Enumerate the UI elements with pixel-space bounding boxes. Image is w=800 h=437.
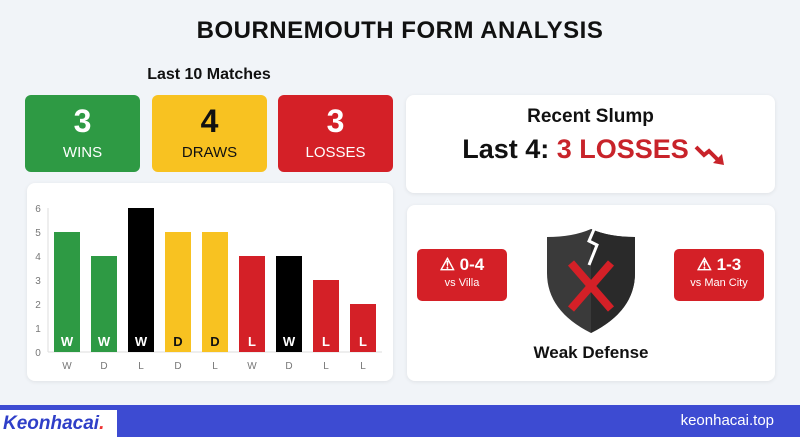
title: BOURNEMOUTH FORM ANALYSIS — [197, 17, 603, 44]
panel: bar chart: W — [98, 334, 111, 349]
panel: recent slump: Recent Slump — [527, 106, 654, 127]
panel: bar chart: D — [100, 361, 108, 372]
bars — [54, 208, 376, 352]
panel: bar chart: 3 — [35, 276, 41, 287]
panel: weak defense — [407, 205, 775, 381]
stat: losses — [278, 95, 393, 172]
panel: bar chart: D — [173, 334, 183, 349]
panel: recent slump: Last 4: 3 LOSSES — [462, 134, 689, 164]
panel: bar chart: 1 — [35, 324, 41, 335]
panel: bar chart — [27, 183, 393, 381]
stat: losses: 3 — [327, 103, 344, 139]
panel: bar chart: W — [62, 361, 72, 372]
icon: down arrow — [694, 146, 724, 165]
callout: 0-4 vs villa: ⚠ 0-4 — [440, 255, 484, 274]
footer — [0, 405, 800, 437]
panel: bar chart: L — [212, 361, 218, 372]
panel: bar chart: W — [61, 334, 74, 349]
panel: bar chart: L — [323, 361, 329, 372]
icon: broken shield — [547, 229, 635, 333]
callout: 1-3 vs man city — [674, 249, 764, 301]
logo — [0, 410, 117, 437]
panel: bar chart: 5 — [35, 228, 41, 239]
stat: draws: 4 — [201, 103, 218, 139]
callout: 0-4 vs villa: vs Villa — [445, 277, 479, 289]
panel: bar chart: D — [210, 334, 220, 349]
stat: wins: 3 — [74, 103, 91, 139]
panel: bar chart: W — [247, 361, 257, 372]
panel: bar chart: 0 — [35, 348, 41, 359]
panel: bar chart: D — [174, 361, 182, 372]
panel: bar chart: L — [138, 361, 144, 372]
subtitle: last 10 matches: Last 10 Matches — [147, 66, 271, 83]
panel: bar chart: L — [248, 334, 256, 349]
stat: wins: WINS — [63, 144, 102, 161]
stat: wins — [25, 95, 140, 172]
panel: bar chart: 6 — [35, 204, 41, 215]
panel: bar chart: L — [360, 361, 366, 372]
stat: draws: DRAWS — [182, 144, 237, 161]
stat: losses: LOSSES — [305, 144, 366, 161]
callout: 0-4 vs villa — [417, 249, 507, 301]
panel: bar chart: 4 — [35, 252, 41, 263]
panel: recent slump — [406, 95, 775, 193]
panel: bar chart: W — [135, 334, 148, 349]
panel: bar chart: 2 — [35, 300, 41, 311]
callout: 1-3 vs man city: ⚠ 1-3 — [697, 255, 741, 274]
footer url: keonhacai.top — [681, 412, 774, 429]
callout: 1-3 vs man city: vs Man City — [690, 277, 748, 289]
panel: bar chart: W — [283, 334, 296, 349]
label: weak defense: Weak Defense — [534, 343, 648, 362]
panel: bar chart: L — [359, 334, 367, 349]
panel: bar chart: D — [285, 361, 293, 372]
logo: Keonhacai. — [3, 413, 104, 434]
panel: bar chart: L — [322, 334, 330, 349]
stat: draws — [152, 95, 267, 172]
